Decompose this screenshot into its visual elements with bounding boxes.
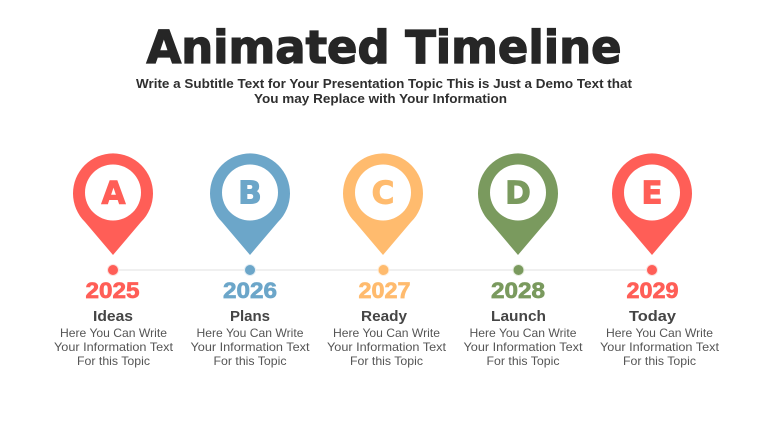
description D: For this Topic — [486, 354, 560, 368]
description E: Your Information Text — [600, 340, 720, 354]
icon: pin E — [612, 153, 692, 255]
marker dot C — [378, 264, 389, 276]
milestone E: 2029 Today — [600, 153, 720, 368]
year 2029: 2029 — [626, 278, 678, 303]
milestone D: 2028 Launch — [464, 153, 583, 368]
description C — [327, 326, 447, 368]
description E — [600, 326, 720, 368]
milestone B: 2026 Plans — [190, 153, 310, 368]
description D — [464, 326, 583, 368]
description C: For this Topic — [350, 354, 423, 368]
marker dot E — [646, 264, 658, 276]
icon: pin A: A — [102, 176, 126, 212]
heading Today: Today — [629, 308, 677, 325]
icon: pin D: D — [505, 176, 531, 212]
subtitle: Write a Subtitle Text for Your Presentation Topic This is Just a Demo Text that — [136, 76, 633, 91]
subtitle: You may Replace with Your Information — [254, 91, 507, 106]
description B: Here You Can Write — [196, 326, 304, 340]
description C: Your Information Text — [327, 340, 447, 354]
description B: Your Information Text — [190, 340, 310, 354]
icon: pin E: E — [641, 176, 663, 212]
description A: For this Topic — [77, 354, 150, 368]
description A — [54, 326, 174, 368]
icon: pin D — [478, 153, 558, 255]
subtitle — [136, 76, 633, 106]
icon: pin C — [343, 153, 423, 255]
year 2028: 2028 — [491, 278, 545, 303]
marker dot B — [244, 264, 256, 276]
heading Launch: Launch — [491, 308, 546, 325]
description E: Here You Can Write — [606, 326, 713, 340]
icon: pin A — [73, 153, 153, 255]
title: Animated Timeline — [146, 21, 622, 74]
heading Ideas: Ideas — [93, 308, 133, 325]
heading Ready: Ready — [361, 308, 408, 325]
year 2027: 2027 — [358, 278, 410, 303]
description D: Here You Can Write — [470, 326, 577, 340]
marker dot D — [513, 264, 524, 276]
icon: pin B — [210, 153, 290, 255]
description C: Here You Can Write — [333, 326, 440, 340]
milestone C: 2027 Ready — [327, 153, 447, 368]
heading Plans: Plans — [230, 308, 270, 325]
description A: Your Information Text — [54, 340, 174, 354]
timeline line — [113, 269, 652, 271]
description A: Here You Can Write — [60, 326, 167, 340]
marker dot A — [108, 264, 118, 276]
description B — [190, 326, 310, 368]
description D: Your Information Text — [464, 340, 583, 354]
icon: pin B: B — [238, 176, 262, 212]
description E: For this Topic — [623, 354, 696, 368]
milestone A: 2025 Ideas — [54, 153, 174, 368]
year 2025: 2025 — [86, 278, 140, 303]
description B: For this Topic — [214, 354, 286, 368]
year 2026: 2026 — [223, 278, 277, 303]
icon: pin C: C — [372, 176, 394, 212]
